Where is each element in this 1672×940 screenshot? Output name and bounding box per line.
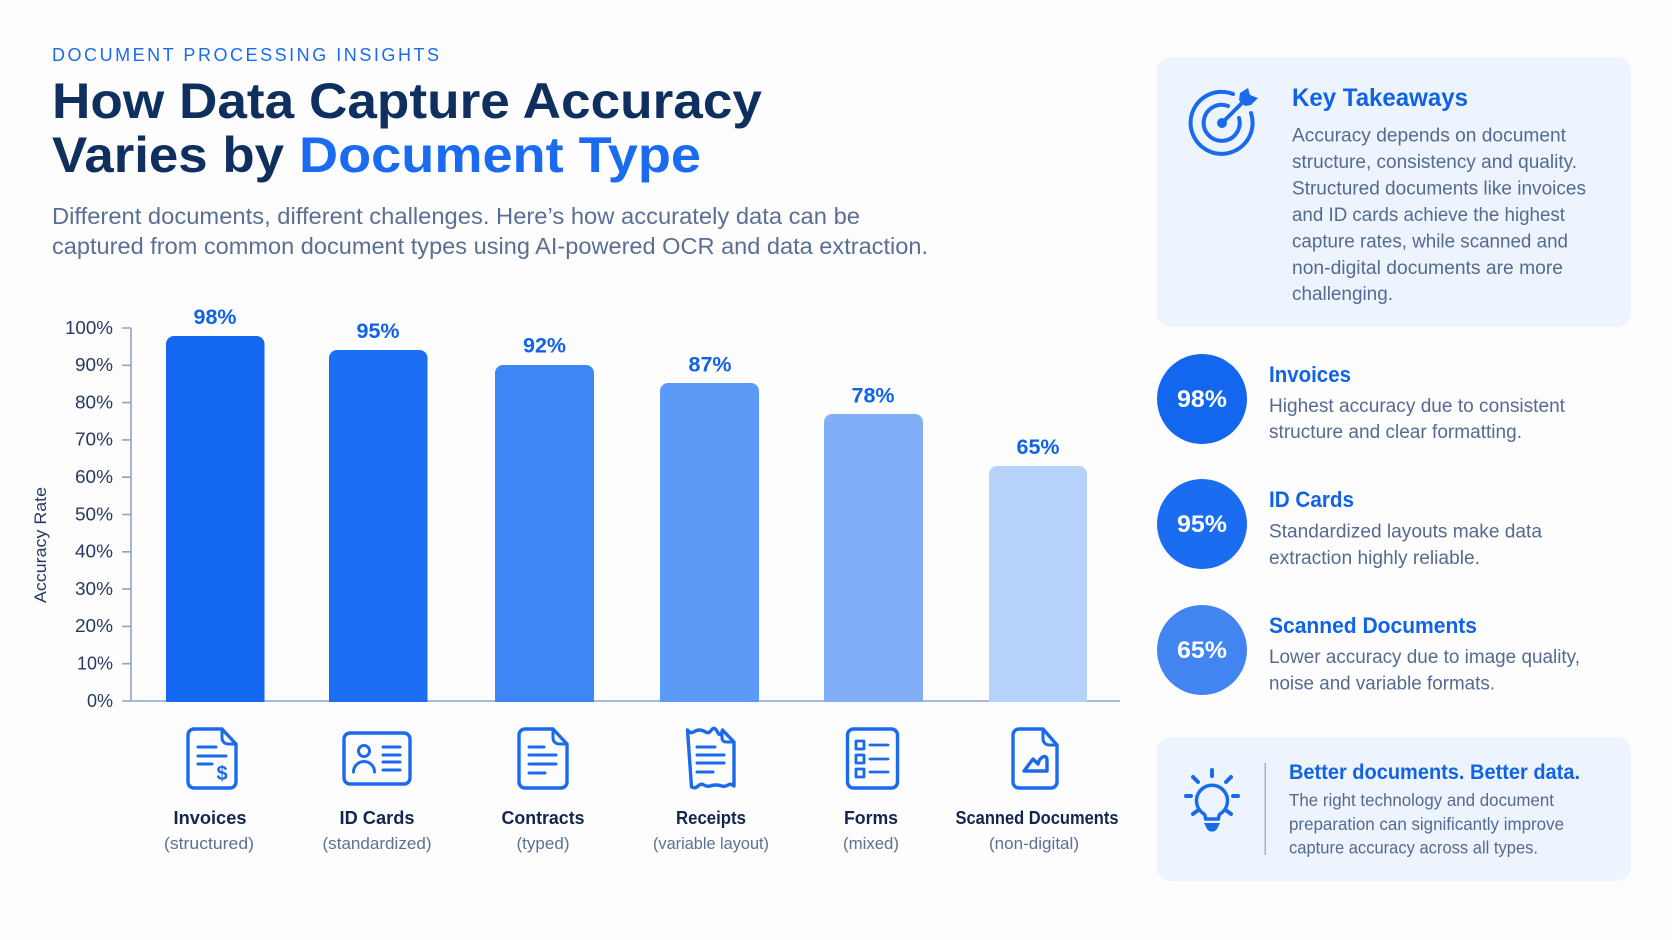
subtitle: Different documents, different challenges. Here’s how accurately data can be: [52, 203, 860, 229]
heading: Key Takeaways: [1292, 84, 1468, 112]
body text: capture rates, while scanned and: [1292, 232, 1568, 252]
y axis: 90%: [75, 355, 113, 375]
category: forms: Forms: [844, 808, 898, 828]
bar: contracts 92%: [495, 334, 594, 702]
stat: id cards: extraction highly reliable.: [1269, 548, 1480, 569]
stat: id cards: ID Cards: [1269, 487, 1354, 512]
stat: id cards: 95%: [1177, 511, 1227, 538]
y axis: 0%: [87, 691, 113, 711]
body text: capture accuracy across all types.: [1289, 838, 1538, 858]
stat: id cards: Standardized layouts make data: [1269, 522, 1542, 542]
category: contracts: (typed): [516, 834, 570, 853]
icon: light bulb: [1186, 770, 1238, 832]
stat: scanned documents: Scanned Documents: [1269, 613, 1477, 638]
category: id cards: ID Cards: [340, 808, 414, 828]
body text: non-digital documents are more: [1292, 258, 1563, 279]
category: contracts: [502, 729, 584, 853]
y axis: 60%: [75, 467, 113, 487]
category: scanned documents: [956, 729, 1118, 853]
icon: form: [848, 729, 898, 788]
body text: challenging.: [1292, 284, 1393, 305]
panel: better documents callout: [1157, 737, 1631, 881]
icon: receipt: [688, 728, 734, 788]
divider: [1264, 763, 1266, 855]
category: forms: (mixed): [843, 834, 899, 853]
body text: [1292, 126, 1586, 305]
y axis: 100%: [65, 318, 113, 338]
bar: receipts 87%: [660, 354, 759, 702]
icon: contract: [519, 729, 567, 788]
stat: scanned documents: 65%: [1177, 637, 1227, 664]
stat: invoices: 98%: [1177, 386, 1227, 413]
body text: Structured documents like invoices: [1292, 178, 1586, 200]
stat: scanned documents: [1157, 605, 1580, 695]
y axis: 50%: [75, 504, 113, 524]
subtitle: captured from common document types using AI-powered OCR and data extraction.: [52, 233, 928, 259]
bar: receipts 87%: 87%: [688, 354, 732, 376]
category: invoices: Invoices: [174, 808, 246, 828]
bar: id cards 95%: 95%: [356, 320, 400, 343]
stat: scanned documents: noise and variable formats.: [1269, 674, 1495, 694]
eyebrow label: DOCUMENT PROCESSING INSIGHTS: [52, 45, 439, 65]
category: scanned documents: Scanned Documents: [956, 808, 1118, 828]
category: receipts: [653, 728, 769, 853]
body text: and ID cards achieve the highest: [1292, 205, 1566, 226]
body text: structure, consistency and quality.: [1292, 152, 1577, 173]
stat: id cards: [1157, 479, 1542, 569]
title: [52, 73, 762, 183]
icon: scanned document: [1013, 729, 1057, 788]
category: id cards: [322, 733, 432, 853]
bar: id cards 95%: [329, 320, 428, 702]
y axis: 40%: [75, 542, 113, 562]
bar: invoices 98%: 98%: [194, 306, 237, 329]
body text: preparation can significantly improve: [1289, 814, 1564, 834]
icon: id card: [344, 733, 410, 784]
category: contracts: Contracts: [502, 808, 584, 828]
bar: forms 78%: [824, 384, 923, 702]
title: Document Type: [299, 127, 701, 183]
y axis title: Accuracy Rate: [31, 487, 50, 603]
body text: The right technology and document: [1289, 790, 1554, 810]
stat: invoices: [1157, 354, 1566, 444]
bar: scanned documents 65%: 65%: [1016, 436, 1060, 459]
stat: invoices: Highest accuracy due to consistent: [1269, 396, 1566, 417]
y axis: 80%: [75, 392, 113, 412]
bar: scanned documents 65%: [989, 436, 1087, 702]
y axis: 20%: [75, 616, 113, 636]
category: forms: [843, 729, 899, 853]
body text: Accuracy depends on document: [1292, 126, 1567, 146]
bar: forms 78%: 78%: [852, 384, 895, 408]
category: scanned documents: (non-digital): [989, 834, 1079, 853]
category: id cards: (standardized): [322, 834, 432, 853]
bar chart: [31, 306, 1120, 711]
category: receipts: (variable layout): [653, 834, 769, 853]
category: invoices: (structured): [164, 834, 254, 853]
stat: scanned documents: Lower accuracy due to image quality,: [1269, 647, 1580, 668]
category: receipts: Receipts: [676, 808, 746, 828]
panel: key takeaways: [1157, 57, 1631, 327]
stat: invoices: structure and clear formatting.: [1269, 422, 1522, 443]
stat: invoices: Invoices: [1269, 362, 1351, 387]
y axis: 10%: [77, 654, 113, 674]
category: invoices: [164, 729, 254, 853]
heading: Better documents. Better data.: [1289, 761, 1580, 784]
icon: invoice: $: [216, 763, 228, 785]
y axis: [65, 318, 1120, 711]
subtitle: [52, 203, 928, 259]
y axis: 30%: [75, 579, 113, 599]
body text: [1289, 790, 1564, 858]
icon: target with arrow: [1191, 88, 1258, 154]
bar: invoices 98%: [166, 306, 264, 702]
bar: contracts 92%: 92%: [523, 334, 566, 358]
y axis: 70%: [75, 430, 113, 450]
title: How Data Capture Accuracy: [52, 73, 762, 129]
title: Varies by: [52, 127, 284, 183]
